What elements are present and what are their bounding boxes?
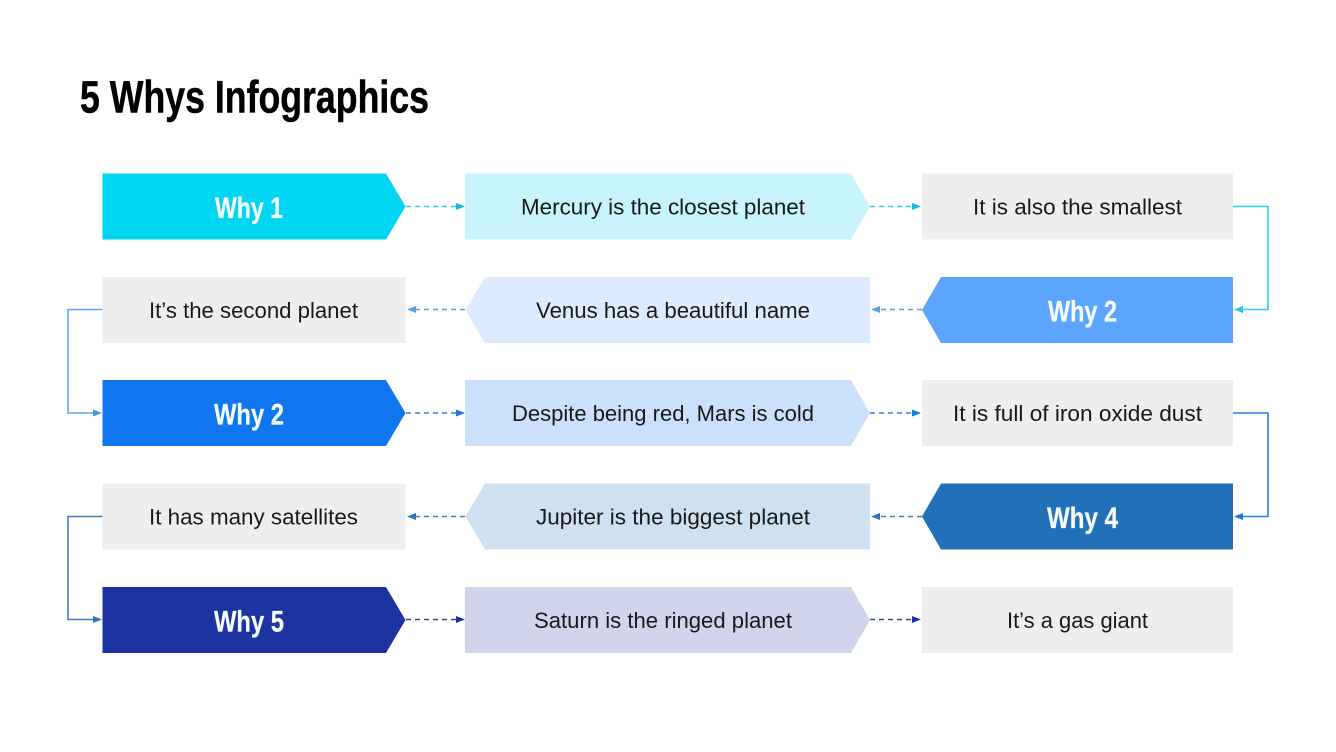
why 2 label arrow	[922, 277, 1233, 343]
arrow: Mercury to detail	[870, 203, 921, 210]
title: 5 Whys Infographics	[80, 72, 429, 122]
arrow: why 1 to answer	[406, 203, 465, 210]
detail: smallest	[922, 174, 1233, 240]
answer: Mercury: Mercury is the closest planet	[521, 194, 805, 220]
why 5 label arrow: Why 5	[214, 606, 284, 638]
connector: row 3 to row 4	[1233, 413, 1268, 520]
row 2: why 2	[102, 277, 1233, 343]
arrow: why 2 to answer	[871, 306, 922, 313]
why 1 label arrow: Why 1	[215, 192, 283, 225]
connector: row 1 to row 2	[1233, 206, 1268, 313]
why 4 label arrow: Why 4	[1047, 502, 1118, 535]
why 1 label arrow	[102, 174, 406, 240]
answer: Venus: Venus has a beautiful name	[536, 298, 810, 323]
arrow: Jupiter to detail	[407, 513, 465, 520]
connector: row 4 to row 5	[68, 516, 102, 623]
connector: row 2 to row 3	[68, 310, 102, 416]
answer: Mars: Despite being red, Mars is cold	[512, 401, 814, 426]
answer: Venus	[466, 277, 870, 343]
arrow: Venus to detail	[407, 306, 465, 313]
arrow: Mars to detail	[870, 410, 921, 416]
detail: iron oxide: It is full of iron oxide dust	[953, 401, 1202, 426]
detail: second planet: It’s the second planet	[149, 298, 358, 323]
row 1: why 1	[102, 174, 1233, 240]
arrow: why 5 to answer	[406, 616, 465, 623]
answer: Mercury	[465, 174, 870, 240]
detail: gas giant	[922, 587, 1233, 653]
answer: Saturn: Saturn is the ringed planet	[534, 608, 792, 633]
why 5 label arrow	[102, 587, 406, 653]
answer: Jupiter	[466, 484, 870, 550]
arrow: Saturn to detail	[870, 616, 921, 623]
arrow: why 2 to answer	[406, 410, 465, 416]
why 2 label arrow: Why 2	[214, 398, 284, 432]
row 3: why 2	[102, 380, 1233, 446]
row 5: why 5	[102, 587, 1233, 653]
detail: second planet	[102, 277, 406, 343]
row 4: why 4	[102, 484, 1233, 550]
detail: satellites	[102, 484, 406, 550]
answer: Saturn	[465, 587, 870, 653]
answer: Mars	[465, 380, 870, 446]
detail: iron oxide	[922, 380, 1233, 446]
answer: Jupiter: Jupiter is the biggest planet	[536, 504, 810, 530]
why 2 label arrow	[102, 380, 406, 446]
why 4 label arrow	[922, 484, 1233, 550]
detail: satellites: It has many satellites	[149, 504, 358, 530]
detail: gas giant: It’s a gas giant	[1007, 608, 1148, 633]
why 2 label arrow: Why 2	[1048, 296, 1117, 328]
detail: smallest: It is also the smallest	[973, 194, 1182, 220]
arrow: why 4 to answer	[871, 513, 922, 520]
